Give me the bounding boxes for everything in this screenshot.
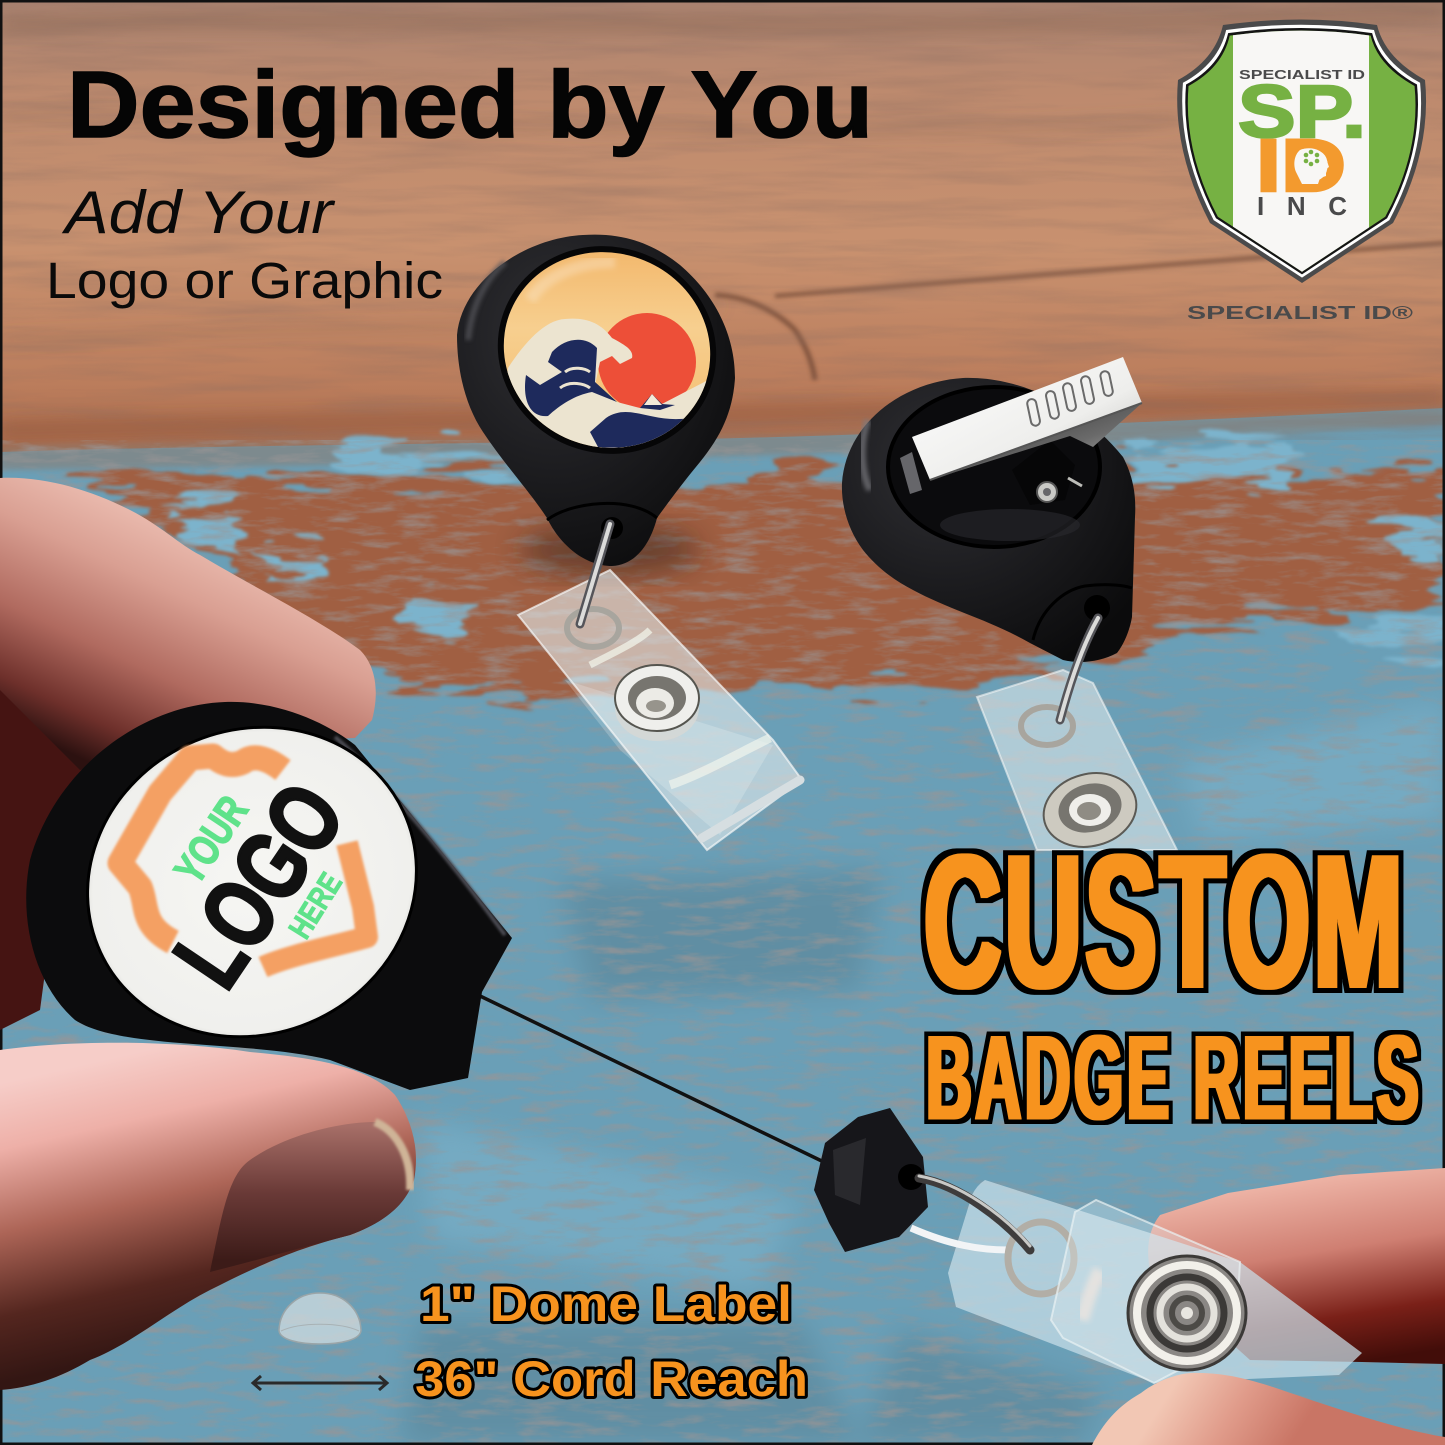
cream wave bbox=[508, 318, 706, 448]
metal ring bbox=[1021, 707, 1073, 745]
navy water bbox=[525, 340, 617, 416]
brand logo shield bbox=[1177, 20, 1426, 283]
reel with wave artwork bbox=[457, 216, 802, 850]
metal snap bbox=[1035, 763, 1145, 857]
rust patches bbox=[70, 462, 1445, 692]
wood plank bbox=[0, 0, 1445, 452]
reel cord bbox=[478, 995, 830, 1165]
title: Designed by You bbox=[67, 52, 873, 158]
orange shield outline bbox=[120, 756, 367, 967]
subtitle: logo or graphic: Logo or Graphic bbox=[46, 252, 443, 309]
dome icon bbox=[279, 1293, 361, 1344]
clear strap bbox=[977, 670, 1177, 850]
red sun bbox=[598, 313, 696, 411]
reel showing back clip bbox=[842, 357, 1177, 857]
dome label with logo: YOUR bbox=[165, 788, 258, 893]
upper finger bbox=[0, 478, 376, 770]
clip pivot bbox=[1012, 440, 1082, 505]
thumb bbox=[0, 1043, 416, 1390]
lower right thumb bbox=[1092, 1373, 1445, 1445]
black cord stopper bbox=[814, 1108, 928, 1252]
double arrow bbox=[253, 1376, 387, 1390]
metal wire bbox=[1060, 618, 1098, 720]
spec: cord reach: 36" Cord Reach bbox=[415, 1351, 808, 1407]
clear front strap bbox=[1051, 1200, 1240, 1383]
metal ring bbox=[1008, 1222, 1074, 1294]
paint speckle texture bbox=[0, 440, 1445, 1445]
white clear strap bbox=[948, 1180, 1362, 1383]
metal snap bbox=[1127, 1255, 1247, 1371]
left hand and big reel bbox=[0, 478, 830, 1390]
cord hole bbox=[1084, 595, 1110, 621]
subtitle: add your: Add Your bbox=[62, 179, 335, 246]
logo INC: INC bbox=[1257, 191, 1347, 221]
pulled cord end with strap bbox=[814, 1108, 1445, 1445]
metal snap bbox=[615, 665, 699, 741]
dome label with logo: HERE bbox=[281, 866, 349, 945]
thumbnail bbox=[210, 1122, 413, 1272]
spec: dome label: 1" Dome Label bbox=[420, 1276, 792, 1332]
metal ring bbox=[567, 609, 619, 647]
logo text: LOGO bbox=[152, 764, 365, 1006]
large black reel bbox=[26, 702, 512, 1090]
teardrop reel body bbox=[457, 235, 735, 566]
painted plank bbox=[0, 408, 1445, 1445]
metal wire bbox=[580, 524, 610, 624]
right fingers holding strap bbox=[1148, 1168, 1445, 1364]
logo wordmark: SPECIALIST ID bbox=[1239, 68, 1365, 82]
head icon bbox=[1294, 148, 1329, 184]
clear strap bbox=[518, 570, 802, 850]
logo ID: ID bbox=[1256, 124, 1346, 207]
wave dome label bbox=[504, 252, 710, 448]
shadowed lower fingers bbox=[0, 680, 120, 1030]
second white wire bbox=[911, 1228, 1008, 1250]
recessed back plate bbox=[888, 387, 1100, 547]
dome label with logo bbox=[36, 674, 468, 1090]
upper right finger bbox=[1148, 1168, 1445, 1364]
metal wire bbox=[919, 1176, 1030, 1250]
logo SP: SP. bbox=[1238, 70, 1366, 153]
wood grain texture bbox=[0, 0, 1445, 440]
metal clip bbox=[900, 357, 1142, 494]
teardrop reel body bbox=[842, 378, 1135, 662]
brand name: SPECIALIST ID® bbox=[1187, 303, 1413, 323]
